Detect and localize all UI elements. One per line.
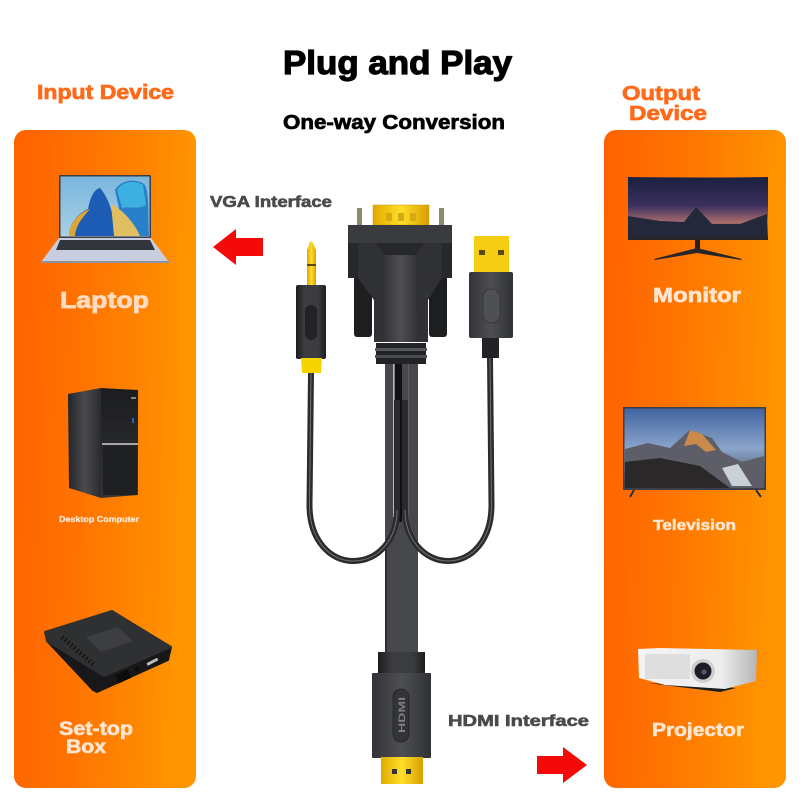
heading: output device: Output: [622, 83, 700, 105]
icon: desktop computer: [68, 388, 138, 498]
icon: laptop: [41, 175, 169, 263]
icon: monitor: [628, 177, 768, 260]
icon: television: [623, 407, 766, 497]
icon: set-top box: [45, 611, 171, 692]
label: television: Television: [653, 517, 736, 534]
label: laptop: Laptop: [60, 287, 149, 313]
label: set-top box: [59, 719, 133, 758]
audio cable loop: [310, 373, 397, 561]
label: set-top box: Box: [66, 737, 106, 758]
flat cable: [385, 362, 418, 655]
icon: projector: [638, 648, 757, 692]
heading: output device: [622, 83, 707, 125]
label: desktop computer: Desktop Computer: [59, 515, 139, 524]
title: Plug and Play: [283, 44, 513, 81]
panel: output devices: [604, 130, 786, 788]
panel: input devices: [14, 130, 196, 788]
cable assembly: [296, 205, 513, 784]
usb cable loop: [405, 358, 492, 561]
subtitle: One-way Conversion: [283, 112, 505, 134]
heading: input device: Input Device: [37, 82, 174, 104]
USB plug: [469, 236, 513, 358]
label: set-top box: Set-top: [59, 719, 133, 740]
label: projector: Projector: [652, 720, 744, 740]
arrow: HDMI to output: [537, 747, 587, 783]
VGA connector: [348, 205, 452, 364]
heading: output device: Device: [629, 103, 707, 125]
label: monitor: Monitor: [653, 285, 741, 307]
HDMI plug: [372, 652, 431, 784]
label: VGA interface: VGA Interface: [210, 194, 332, 211]
audio jack: [296, 241, 326, 373]
label: HDMI interface: HDMI Interface: [448, 713, 589, 730]
arrow: VGA to laptop: [213, 229, 263, 265]
HDMI plug: HDMI: [397, 697, 407, 733]
